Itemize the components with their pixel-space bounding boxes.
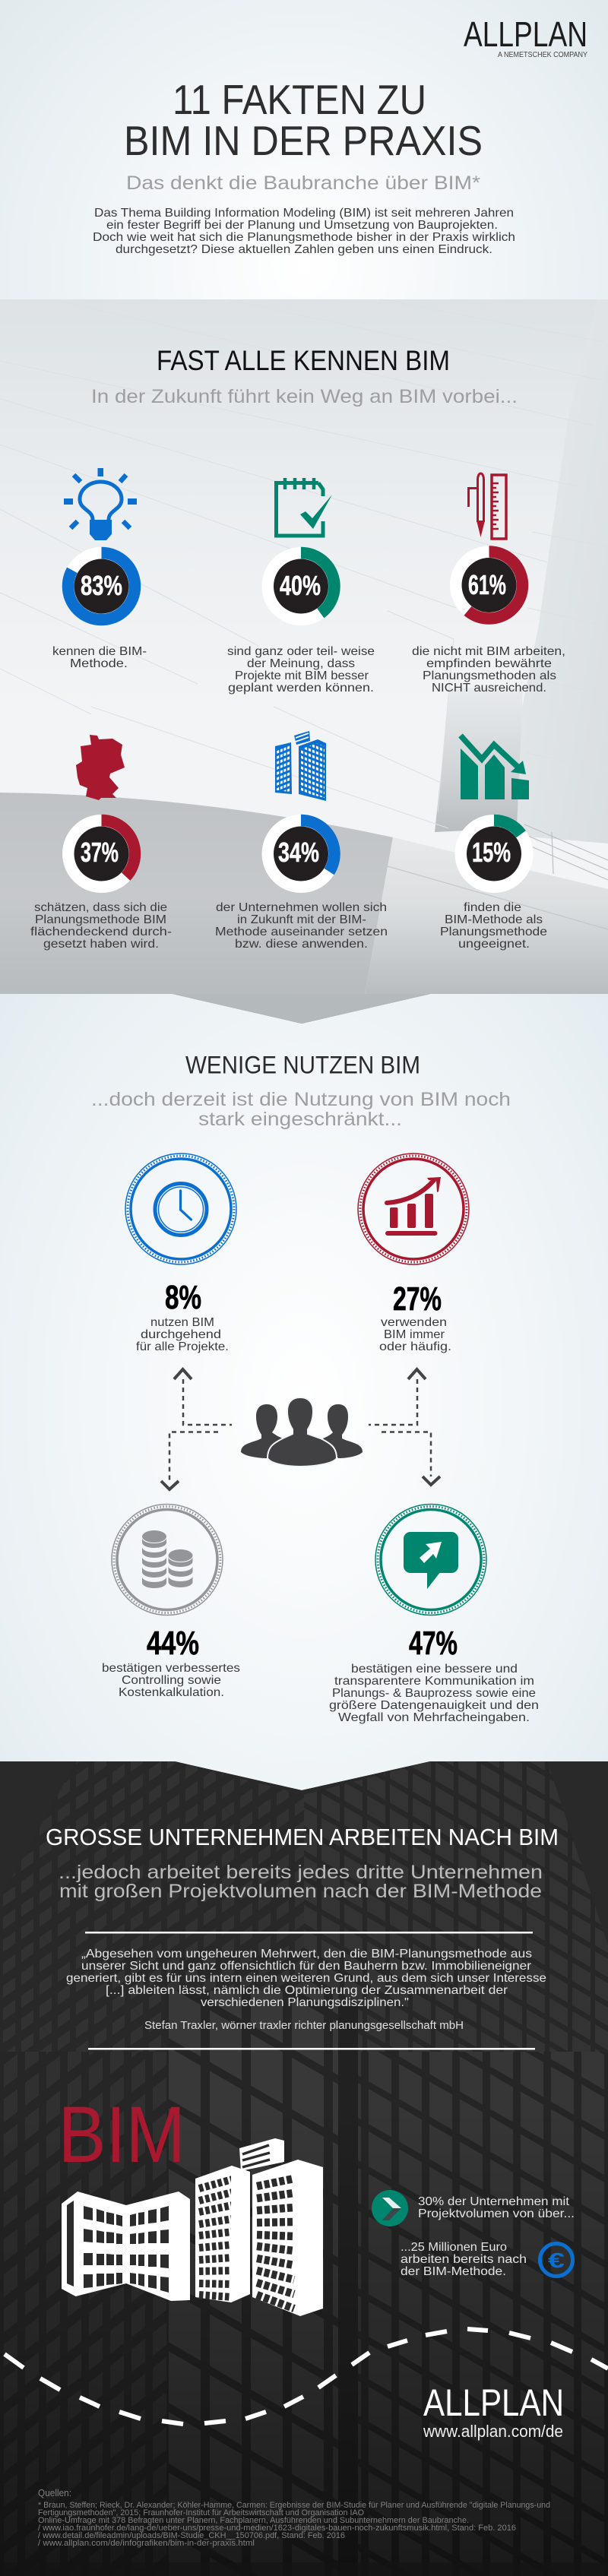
sources: / www.iao.fraunhofer.de/lang-de/ueber-uns/presse-und-medien/1623-digitales-bauen-noch-zukunftsmusik.html, Stand: Feb. 2016 — [38, 2524, 516, 2533]
subheading: ...doch derzeit ist die Nutzung von BIM noch — [91, 1089, 511, 1110]
panel: dark facade background — [0, 1761, 608, 2576]
text: 61%: Planungsmethoden als — [423, 669, 556, 682]
icon: speech bubble in teal ring — [375, 1505, 486, 1616]
text: 61% — [412, 645, 565, 695]
panel: architecture background — [0, 299, 608, 1024]
text: 15%: Planungsmethode — [440, 926, 547, 938]
stat: 8%: für alle Projekte. — [136, 1340, 229, 1353]
donut: 40% — [261, 547, 340, 625]
subheading: stark eingeschränkt... — [198, 1109, 402, 1130]
text: 40%: der Meinung, dass — [247, 657, 355, 670]
donut: 83% — [62, 547, 141, 625]
stat: 47%: bestätigen eine bessere und — [351, 1663, 518, 1676]
callout: 25 million euro: der BIM-Methode. — [401, 2265, 506, 2278]
logo: Allplan footer: ALLPLAN — [423, 2381, 564, 2424]
icon: clock in blue ring — [125, 1154, 236, 1264]
subheading — [59, 1862, 543, 1902]
donut: 61% — [450, 546, 528, 625]
stat: 8%: nutzen BIM — [150, 1316, 214, 1329]
callout: 30 percent — [372, 2190, 575, 2226]
text: 34% — [215, 901, 388, 951]
text: 34%: Methode auseinander setzen — [215, 926, 388, 938]
donut: 15% — [454, 815, 534, 893]
sources — [38, 2487, 550, 2548]
stat: 44% — [102, 1625, 240, 1699]
intro text: durchgesetzt? Diese aktuellen Zahlen geben uns einen Eindruck. — [116, 243, 492, 256]
intro text: ein fester Begriff bei der Planung und Umsetzung von Bauprojekten. — [106, 219, 498, 232]
stat: 27%: verwenden — [381, 1316, 447, 1329]
icon: group of people — [241, 1397, 363, 1467]
title — [124, 76, 483, 164]
stat: 27%: oder häufig. — [379, 1340, 451, 1353]
background: intro panel — [0, 0, 608, 299]
icon: white buildings — [62, 2138, 323, 2316]
stat: 27%: 27% — [393, 1280, 442, 1318]
sources: Online-Umfrage mit 378 Befragten unter Planern, Fachplanern, Ausführenden und Subunternehmern der Baubranche. — [38, 2516, 469, 2525]
arrow: down left — [161, 1432, 218, 1489]
callout: 25 million euro: arbeiten bereits nach — [401, 2253, 527, 2266]
stat: 27%: BIM immer — [384, 1328, 445, 1341]
stat: 47%: transparentere Kommunikation im — [334, 1675, 534, 1688]
text: 37%: flächendeckend durch- — [30, 926, 172, 938]
text: 15%: finden die — [464, 901, 521, 914]
donut: 83%: 83% — [81, 570, 122, 601]
icon: pen and ruler — [468, 473, 506, 539]
subtitle: Das denkt die Baubranche über BIM* — [126, 172, 480, 194]
sources: / www.detail.de/fileadmin/uploads/BIM-Studie_CKH__150706.pdf, Stand: Feb. 2016 — [38, 2531, 345, 2540]
subheading: ...jedoch arbeitet bereits jedes dritte Unternehmen — [59, 1862, 543, 1883]
heading: wenige nutzen BIM: WENIGE NUTZEN BIM — [185, 1052, 420, 1079]
sources: Fertigungsmethoden", 2015; Fraunhofer-Institut für Arbeitswirtschaft und Organisation IAO — [38, 2508, 364, 2517]
donut: 61%: 61% — [468, 569, 506, 600]
quote block — [66, 1932, 546, 2050]
text: 37%: Planungsmethode BIM — [35, 913, 166, 926]
text: 37% — [30, 901, 172, 951]
stat: 47%: Wegfall von Mehrfacheingaben. — [338, 1711, 530, 1724]
icon: rising chart in red ring — [358, 1154, 469, 1264]
icon: light bulb — [64, 468, 137, 540]
arrow: up left — [174, 1369, 232, 1425]
text: 83%: kennen die BIM- — [52, 645, 147, 658]
heading: fast alle kennen BIM: FAST ALLE KENNEN BIM — [157, 345, 450, 376]
donut: 15%: 15% — [472, 837, 511, 868]
text: 61%: die nicht mit BIM arbeiten, — [412, 645, 565, 658]
logo: Allplan footer — [423, 2381, 564, 2441]
text: 34%: bzw. diese anwenden. — [235, 938, 368, 951]
icon: falling bar chart — [461, 736, 529, 799]
quote block: Stefan Traxler, wörner traxler richter planungsgesellschaft mbH — [144, 2020, 464, 2032]
stat: 47%: größere Datengenauigkeit und den — [329, 1699, 539, 1712]
heading: BIM: BIM — [58, 2090, 185, 2179]
quote block: „Abgesehen vom ungeheuren Mehrwert, den die BIM-Planungsmethode aus — [81, 1948, 532, 1960]
callout: 25 million euro: ...25 Millionen Euro — [401, 2241, 507, 2254]
background: usage panel — [0, 994, 608, 1790]
subheading: In der Zukunft führt kein Weg an BIM vorbei... — [91, 386, 518, 407]
stat: 47%: 47% — [409, 1625, 458, 1662]
text: 61%: empfinden bewährte — [426, 657, 552, 670]
arrow: down right — [382, 1432, 440, 1485]
donut: 40%: 40% — [280, 570, 321, 601]
icon: map of Germany — [76, 735, 125, 800]
text: 83% — [52, 645, 147, 670]
icon: coins in grey ring — [112, 1505, 223, 1616]
sources: / www.allplan.com/de/infografiken/bim-in-der-praxis.html — [38, 2539, 255, 2548]
title: BIM IN DER PRAXIS — [124, 117, 483, 164]
intro text: Doch wie weit hat sich die Planungsmethode bisher in der Praxis wirklich — [93, 231, 515, 244]
quote block: unserer Sicht und ganz offensichtlich für den Bauherrn bzw. Immobilieneigner — [81, 1960, 532, 1973]
title: 11 FAKTEN ZU — [173, 76, 426, 123]
arrow: up right — [369, 1369, 426, 1425]
text: 15%: BIM-Methode als — [445, 913, 543, 926]
callout: 25 million euro — [401, 2241, 573, 2278]
subheading: mit großen Projektvolumen nach der BIM-Methode — [59, 1881, 542, 1902]
icon: notepad with check — [277, 478, 332, 536]
text: 40%: geplant werden können. — [228, 682, 374, 695]
callout: 25 million euro: € — [548, 2248, 565, 2272]
callout: 30 percent: Projektvolumen von über... — [418, 2207, 575, 2220]
stat: 44%: 44% — [147, 1625, 199, 1662]
intro text — [93, 207, 515, 256]
text: 40%: sind ganz oder teil- weise — [227, 645, 375, 658]
icon: office towers — [275, 731, 326, 801]
sources: Quellen: — [38, 2487, 71, 2498]
stat: 8%: durchgehend — [141, 1328, 221, 1341]
quote block: verschiedenen Planungsdisziplinen." — [201, 1996, 409, 2009]
logo: Allplan footer: www.allplan.com/de — [423, 2422, 563, 2441]
stat: 44%: Kostenkalkulation. — [119, 1686, 224, 1699]
stat: 27% — [379, 1280, 451, 1353]
quote block: [...] ableiten lässt, nämlich die Optimierung der Zusammenarbeit der — [106, 1984, 508, 1997]
text: 37%: gesetzt haben wird. — [43, 938, 159, 951]
text: 34%: der Unternehmen wollen sich — [216, 901, 387, 914]
text: 83%: Methode. — [70, 657, 128, 670]
logo: Allplan header: A NEMETSCHEK COMPANY — [498, 50, 587, 59]
stat: 8% — [136, 1279, 229, 1353]
quote block: generiert, gibt es für uns intern einen weiteren Grund, aus dem sich unser Interesse — [66, 1972, 546, 1985]
donut: 37% — [62, 815, 141, 893]
donut: 34%: 34% — [278, 837, 319, 868]
donut: 34% — [261, 815, 340, 893]
stat: 44%: Controlling sowie — [122, 1674, 221, 1687]
text: 34%: in Zukunft mit der BIM- — [237, 913, 366, 926]
text: 40% — [227, 645, 375, 695]
text: 61%: NICHT ausreichend. — [432, 682, 546, 695]
stat: 44%: bestätigen verbessertes — [102, 1662, 240, 1675]
text: 40%: Projekte mit BIM besser — [235, 669, 369, 682]
sources: * Braun, Steffen; Rieck, Dr. Alexander; Köhler-Hamme, Carmen: Ergebnisse der BIM-Studie für Planer und Ausführende "digitale Planungs-und — [38, 2501, 550, 2510]
stat: 47%: Planungs- & Bauprozess sowie eine — [332, 1687, 536, 1700]
text: 15%: ungeeignet. — [458, 938, 530, 951]
text: 15% — [440, 901, 547, 951]
stat: 47% — [329, 1625, 539, 1724]
stat: 8%: 8% — [165, 1279, 201, 1316]
donut: 37%: 37% — [81, 837, 119, 868]
intro text: Das Thema Building Information Modeling (BIM) ist seit mehreren Jahren — [94, 207, 514, 220]
heading: grosse Unternehmen: GROSSE UNTERNEHMEN ARBEITEN NACH BIM — [46, 1824, 559, 1850]
dashed curve — [5, 2329, 608, 2424]
callout: 30 percent: 30% der Unternehmen mit — [418, 2195, 570, 2208]
text: 37%: schätzen, dass sich die — [34, 901, 167, 914]
subheading — [91, 1089, 511, 1130]
